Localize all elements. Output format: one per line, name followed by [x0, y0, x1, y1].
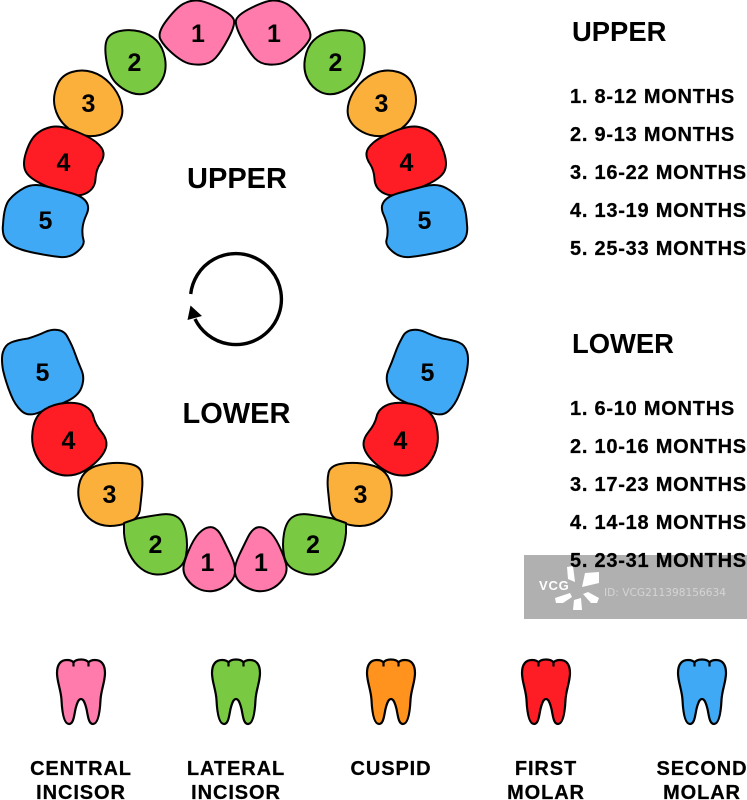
label: first molar: FIRST	[515, 758, 577, 780]
upper left central incisor: 1	[191, 20, 205, 48]
upper right lateral incisor: 2	[329, 49, 342, 77]
heading: lower arch: LOWER	[183, 398, 291, 430]
upper left lateral incisor: 2	[128, 49, 141, 77]
lower left cuspid	[78, 463, 142, 526]
lower left cuspid: 3	[103, 481, 116, 509]
lower left central incisor	[183, 527, 235, 591]
lower timeline entries: 1. 6-10 MONTHS	[570, 398, 735, 420]
panel: lower eruption list	[570, 328, 747, 572]
legend: tooth types	[30, 660, 747, 800]
lower right central incisor	[235, 527, 287, 591]
upper right first molar	[366, 126, 446, 195]
icon: second molar tooth	[678, 660, 726, 724]
lower left lateral incisor: 2	[149, 531, 162, 559]
lower left first molar: 4	[62, 427, 76, 455]
lower right cuspid: 3	[354, 481, 367, 509]
lower right lateral incisor: 2	[306, 531, 320, 559]
upper left first molar	[24, 126, 104, 195]
upper right second molar	[382, 185, 467, 257]
upper left second molar: 5	[39, 207, 53, 235]
lower left second molar: 5	[36, 359, 50, 387]
lower right first molar	[364, 403, 438, 476]
lower right lateral incisor	[283, 514, 346, 575]
upper left first molar: 4	[57, 149, 71, 177]
lower right first molar: 4	[394, 427, 408, 455]
lower left first molar	[32, 403, 106, 476]
upper right cuspid	[348, 70, 416, 136]
heading: upper list: UPPER	[572, 16, 667, 47]
lower right central incisor: 1	[254, 549, 268, 577]
upper right lateral incisor	[304, 30, 365, 94]
upper left cuspid: 3	[82, 90, 95, 118]
heading: lower list: LOWER	[572, 328, 674, 359]
watermark panel: ID: VCG211398156634	[604, 587, 726, 599]
watermark panel	[524, 555, 747, 619]
lower arch teeth	[2, 330, 468, 591]
upper arch teeth	[3, 0, 467, 257]
lower left second molar	[2, 330, 83, 414]
lower timeline entries: 3. 17-23 MONTHS	[570, 474, 747, 496]
upper left lateral incisor	[105, 30, 166, 94]
upper left second molar	[3, 185, 88, 257]
upper right second molar: 5	[418, 207, 432, 235]
upper right central incisor	[236, 0, 310, 65]
upper timeline entries: 3. 16-22 MONTHS	[570, 162, 747, 184]
label: second molar: SECOND	[657, 758, 747, 780]
lower left lateral incisor	[124, 514, 187, 575]
watermark panel: VCG	[539, 578, 570, 593]
upper right first molar: 4	[400, 149, 414, 177]
lower timeline entries: 2. 10-16 MONTHS	[570, 436, 747, 458]
icon: central incisor tooth	[57, 660, 105, 724]
icon: first molar tooth	[522, 660, 570, 724]
icon: lateral incisor tooth	[212, 660, 260, 724]
lower timeline entries: 4. 14-18 MONTHS	[570, 512, 747, 534]
label: lateral incisor: LATERAL	[187, 758, 285, 780]
heading: upper arch: UPPER	[187, 163, 287, 195]
upper timeline entries	[570, 86, 747, 260]
upper left cuspid	[54, 70, 122, 136]
upper right central incisor: 1	[267, 20, 281, 48]
lower timeline entries: 5. 23-31 MONTHS	[570, 550, 747, 572]
upper timeline entries: 5. 25-33 MONTHS	[570, 238, 747, 260]
upper timeline entries: 4. 13-19 MONTHS	[570, 200, 747, 222]
upper right cuspid: 3	[375, 90, 388, 118]
lower left central incisor: 1	[201, 549, 215, 577]
upper timeline entries: 2. 9-13 MONTHS	[570, 124, 735, 146]
upper timeline entries: 1. 8-12 MONTHS	[570, 86, 735, 108]
icon: cuspid tooth	[367, 660, 415, 724]
label: central incisor: CENTRAL	[30, 758, 132, 780]
lower timeline entries	[570, 398, 747, 572]
lower right second molar: 5	[421, 359, 435, 387]
lower right cuspid	[328, 463, 392, 526]
panel: upper eruption list	[570, 16, 747, 260]
upper left central incisor	[160, 0, 234, 65]
lower right second molar	[387, 330, 468, 414]
arrow: circular direction	[188, 254, 281, 345]
label: cuspid: CUSPID	[351, 758, 431, 780]
